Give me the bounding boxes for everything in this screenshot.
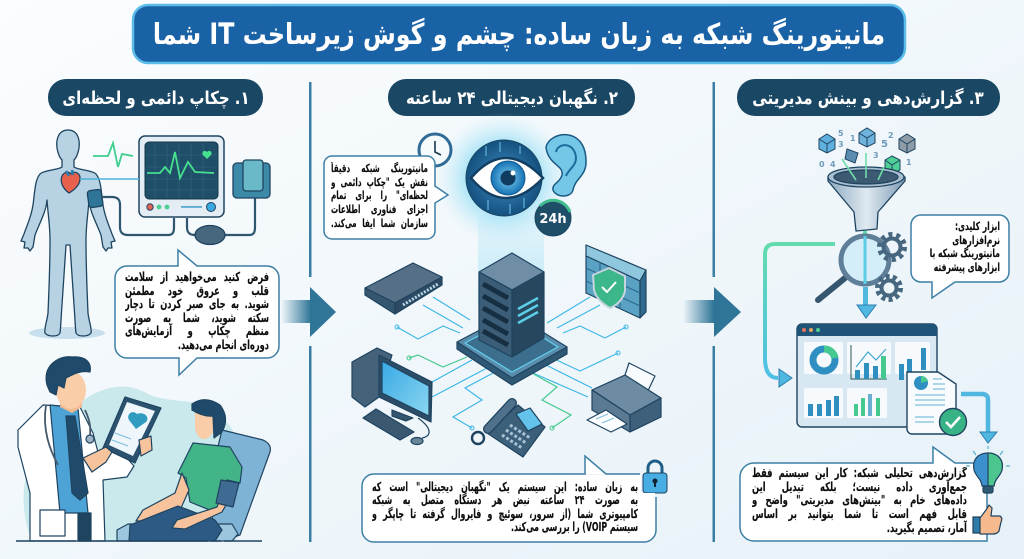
connector: heart to monitor bbox=[80, 178, 139, 180]
arrow head into dashboard bbox=[779, 369, 792, 387]
icon: data cubes and numbers: 1 bbox=[850, 134, 856, 143]
icon: digital eye bbox=[466, 140, 543, 216]
callout: column 3 reporting: آمار، تصمیم بگیرید. bbox=[887, 521, 967, 535]
heading: column 1: ۱. چکاپ دائمی و لحظه‌ای bbox=[62, 88, 250, 109]
patient chair bbox=[205, 430, 270, 541]
icon: gears bbox=[878, 234, 904, 300]
heading: column 2 bbox=[388, 79, 635, 116]
icon: brain light bulb bbox=[966, 446, 1010, 493]
callout: key tools bbox=[911, 215, 1009, 298]
icon: data cubes and numbers: 0 bbox=[819, 160, 825, 169]
icon: 24h badge: 24h bbox=[539, 212, 567, 227]
icon: data cubes and numbers: 4 bbox=[830, 160, 836, 169]
arrow: report to insight bbox=[961, 394, 997, 443]
callout: column 2 simple explanation: به صورت ۲۴ ساعته نبض هر دستگاه متصل به شبکه bbox=[372, 492, 638, 507]
callout: column 2 simple explanation bbox=[362, 456, 656, 542]
callout: column 3 reporting: جمع‌آوری داده نیست؛ بلکه تبدیل این bbox=[752, 480, 967, 494]
icon: printer bbox=[587, 363, 661, 432]
title banner: مانیتورینگ شبکه به زبان ساده: چشم و گوش زیرساخت IT شما bbox=[153, 17, 885, 52]
icon: data cubes and numbers bbox=[819, 128, 915, 174]
icon: firewall with shield bbox=[586, 245, 646, 318]
icon: desktop computer bbox=[352, 348, 432, 444]
icon: clock bbox=[419, 134, 451, 166]
icon: patient monitor bbox=[139, 136, 224, 217]
callout: column 1 analogy: سکته شوید، شما به صورت bbox=[125, 310, 269, 325]
icon: pulse line bbox=[93, 143, 133, 167]
icon: 24h badge bbox=[535, 200, 571, 236]
callout: column 2 simple explanation: سیستم VOIP) را بررسی می‌کند. bbox=[511, 519, 638, 534]
callout: column 1 analogy: قلب و عروق خود مطمئن bbox=[125, 283, 269, 298]
callout: key tools: ابزارهای پیشرفته bbox=[934, 260, 1000, 274]
icon: data cubes and numbers: 1 bbox=[906, 158, 912, 167]
callout: key tools: مانیتورینگ شبکه با bbox=[930, 246, 1000, 260]
title banner bbox=[133, 5, 905, 63]
arrow: column 1 to column 2 bbox=[281, 287, 336, 337]
callout: column 1 analogy: شوید. به جای صبر کردن تا دچار bbox=[125, 296, 269, 311]
icon: server rack bbox=[457, 253, 567, 385]
callout: column 2 monitoring role: نقش یک "چکاپ دائمی و bbox=[331, 176, 428, 189]
heading: column 3: ۳. گزارش‌دهی و بینش مدیریتی bbox=[752, 87, 984, 109]
icon: funnel bbox=[828, 153, 905, 231]
callout: column 2 monitoring role: سازمان شما ایفا می‌کند. bbox=[331, 217, 428, 230]
icon: human body with heart bbox=[21, 130, 115, 339]
icon: data cubes and numbers: 5 bbox=[881, 139, 888, 150]
icon: ear bbox=[546, 135, 586, 196]
ground line bbox=[16, 540, 262, 542]
icon: report document with check bbox=[907, 372, 966, 436]
tablet bbox=[103, 397, 161, 463]
dashboard bbox=[797, 324, 937, 427]
callout: key tools: نرم‌افزارهای bbox=[952, 233, 1000, 247]
illustration: doctor and patient bbox=[18, 357, 270, 541]
icon: blood pressure cuff and tubes bbox=[102, 160, 270, 244]
callout: column 3 reporting: قابل فهم است تا شما بتوانید بر اساس bbox=[752, 507, 967, 521]
arrow: column 2 to column 3 bbox=[683, 287, 741, 337]
callout: column 2 monitoring role: مانیتورینگ شبکه دقیقاً bbox=[331, 162, 428, 175]
green flow line bbox=[765, 244, 835, 378]
network lines bbox=[395, 297, 628, 430]
icon: data cubes and numbers: 3 bbox=[838, 140, 844, 149]
icon: desk phone bbox=[472, 403, 545, 457]
callout: column 1 analogy: دوره‌ای انجام می‌دهید. bbox=[178, 337, 269, 352]
callout: column 2 monitoring role bbox=[324, 156, 448, 239]
heading: column 3 bbox=[737, 79, 1000, 116]
callout: column 1 analogy: منظم چکاپ و آزمایش‌های bbox=[125, 323, 269, 338]
icon: data cubes and numbers: 2 bbox=[888, 131, 894, 140]
heading: column 2: ۲. نگهبان دیجیتالی ۲۴ ساعته bbox=[406, 87, 618, 109]
callout: column 2 monitoring role: اجزای فناوری اطلاعات bbox=[331, 203, 428, 216]
heading: column 1 bbox=[48, 79, 263, 116]
beams of light bbox=[435, 112, 571, 305]
patient bbox=[178, 443, 242, 513]
arrow: magnifier to dashboard bbox=[857, 287, 876, 318]
doctor bbox=[18, 405, 134, 541]
callout: column 1 analogy bbox=[115, 250, 279, 375]
callout: column 2 simple explanation: کامپیوتری شما (از سرور، سوئیچ و فایروال گرفته تا چاپگر و bbox=[372, 506, 638, 521]
column dividers bbox=[309, 82, 715, 542]
callout: column 2 monitoring role: لحظه‌ای" را برای تمام bbox=[331, 189, 428, 202]
icon: magnifier bbox=[818, 236, 889, 300]
icon: data cubes and numbers: 3 bbox=[873, 151, 879, 160]
callout: column 3 reporting bbox=[740, 447, 987, 541]
icon: data cubes and numbers: 5 bbox=[838, 129, 844, 138]
icon: padlock bbox=[643, 461, 667, 493]
icon: thumbs up bbox=[973, 505, 1002, 534]
icon: network switch bbox=[365, 263, 442, 314]
callout: column 3 reporting: داده‌های خام به "بینش‌های مدیریتی" واضح و bbox=[752, 493, 967, 507]
